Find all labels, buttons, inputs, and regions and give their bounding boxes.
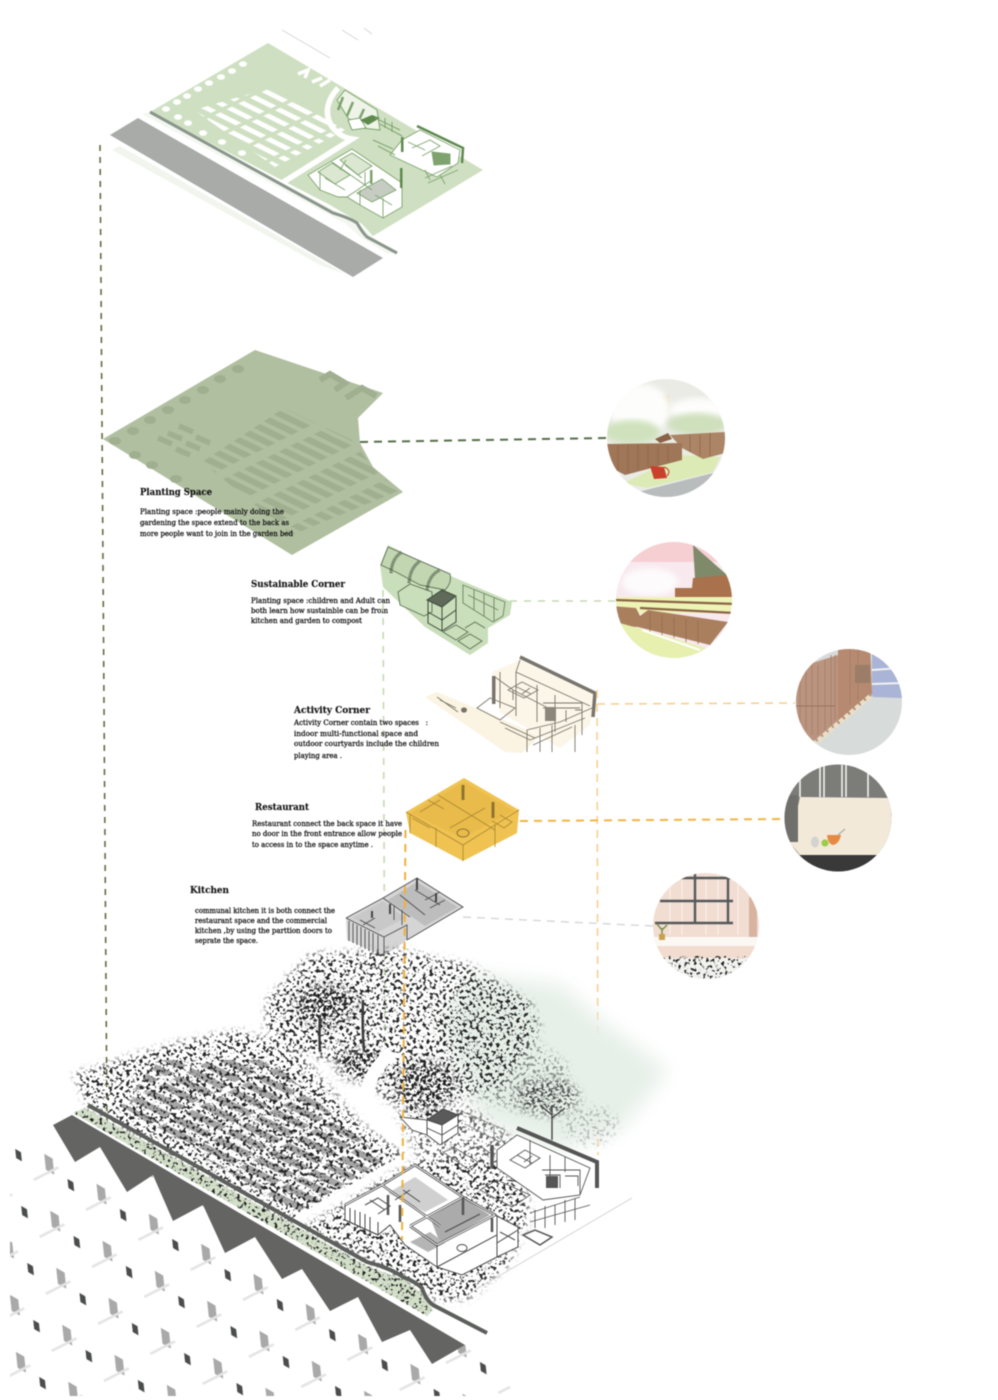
pergola	[427, 590, 456, 631]
base: white garden path	[295, 1052, 425, 1224]
dark kerb line	[150, 112, 397, 253]
walls	[346, 878, 463, 956]
dashed leader: activity to base	[597, 690, 598, 1155]
green base	[380, 545, 512, 655]
base: tree canopy	[266, 950, 618, 1145]
base: activity linework	[470, 1128, 632, 1293]
heading: Sustainable Corner: Sustainable Corner	[251, 580, 345, 590]
feature tree	[515, 1079, 579, 1115]
greenhouse outline	[381, 547, 450, 590]
kitchen and restaurant block	[308, 149, 402, 218]
green site plane	[150, 43, 483, 236]
pale ground strip under road	[112, 146, 345, 274]
cream courtyard	[425, 692, 540, 753]
text: activity corner description: Activity Corner contain two spaces :	[293, 718, 428, 727]
circular planters	[109, 365, 244, 483]
columns	[388, 1195, 492, 1232]
dashed leader: restaurant to circle	[520, 819, 785, 821]
text: kitchen description: seprate the space.	[195, 936, 258, 945]
building floor	[492, 660, 595, 748]
white pavement strip along road	[142, 112, 396, 254]
window block	[545, 707, 556, 721]
base: pergola and planters	[400, 1109, 505, 1169]
right side light canopy	[480, 1040, 570, 1112]
grey road	[110, 118, 383, 277]
heading: Kitchen: Kitchen	[190, 886, 229, 896]
circle: restaurant counter vignette	[784, 764, 892, 872]
text: sustainable corner description: both learn how sustainble can be from	[251, 606, 388, 615]
circle: kitchen window vignette	[652, 872, 760, 980]
columns	[463, 785, 493, 818]
yellow volume	[406, 778, 519, 861]
dashed leader: sustainable to circle	[510, 600, 617, 602]
dark fixtures	[372, 878, 436, 918]
courtyard dot	[461, 707, 467, 713]
text: restaurant description: no door in the front entrance allow people	[252, 829, 402, 838]
shed	[398, 584, 432, 616]
building white footprint	[345, 1165, 518, 1275]
facade	[345, 1190, 518, 1267]
circle: sustainable corner vignette	[615, 542, 733, 658]
greenhouse ribs	[391, 552, 440, 590]
text: sustainable corner description: kitchen and garden to compost	[251, 616, 362, 625]
text: planting space description: Planting space :people mainly doing the	[140, 507, 284, 516]
interior floor	[411, 782, 514, 838]
long garden beds	[202, 408, 398, 535]
activity corner layer	[425, 657, 595, 753]
L-shaped beds	[320, 374, 376, 398]
white paths	[282, 88, 352, 183]
text: kitchen description: communal kitchen it is both connect the	[195, 906, 335, 915]
heading: Restaurant: Restaurant	[255, 803, 310, 813]
text: kitchen description: restaurant space and the commercial	[195, 916, 328, 925]
base: kerb line	[88, 1105, 487, 1333]
dark wall caps	[520, 657, 595, 717]
base: planting field	[74, 1030, 405, 1224]
white circular planters	[162, 61, 247, 156]
text: planting space description: gardening the space extend to the back as	[140, 518, 289, 527]
trunks	[320, 1000, 364, 1052]
sage green plane	[103, 350, 403, 555]
sustainable corner block	[337, 90, 402, 155]
white L-shaped beds	[298, 70, 330, 86]
text: activity corner description: playing area .	[294, 751, 342, 760]
darker floors	[388, 882, 458, 926]
compost boxes	[443, 622, 485, 649]
base: dark sawtooth road	[53, 1115, 465, 1364]
grey beds	[120, 1060, 385, 1212]
dashed leader: sustainable to base	[383, 590, 385, 1070]
text: restaurant description: to access in to the space anytime .	[252, 840, 373, 849]
dense canopy knots	[395, 1061, 455, 1109]
activity block	[390, 126, 463, 184]
double wall tops light	[345, 1165, 495, 1245]
text: restaurant description: Restaurant connect the back space it have	[252, 819, 402, 828]
faint context lines	[282, 28, 372, 58]
circle: planting beds vignette	[606, 379, 726, 498]
planter racks	[463, 585, 505, 622]
kitchen layer	[346, 878, 463, 956]
interior walls	[406, 795, 519, 861]
grey floors	[430, 1198, 490, 1243]
dashed leader: activity to circle	[597, 703, 795, 704]
base: green verge	[73, 1108, 433, 1316]
text: activity corner description: indoor multi-functional space and	[294, 729, 418, 738]
speckle ground	[74, 1030, 405, 1224]
grey volume	[346, 878, 463, 956]
dashed leader: restaurant to base	[402, 830, 406, 1240]
text: kitchen description: kitchen ,by using the parttion doors to	[195, 926, 332, 935]
circle: activity stairs vignette	[795, 648, 902, 756]
text: sustainable corner description: Planting space :children and Adult can	[251, 596, 390, 605]
small beds	[158, 426, 210, 455]
base: door pattern ground	[10, 1125, 520, 1396]
furniture	[457, 1244, 467, 1252]
heading: Activity Corner: Activity Corner	[293, 706, 370, 716]
dashed leader: site plan down to base	[100, 145, 107, 1125]
activity walls	[437, 660, 592, 752]
white bed grid	[194, 88, 345, 167]
text: activity corner description: outdoor courtyards include the children	[294, 739, 439, 748]
heading: Planting Space: Planting Space	[140, 488, 212, 498]
top site plan in green	[110, 28, 483, 277]
sustainable corner layer	[380, 545, 512, 655]
base: kitchen and restaurant linework	[345, 1165, 518, 1275]
double wall tops dark	[345, 1165, 495, 1245]
planting layer	[103, 350, 403, 555]
round table	[457, 829, 469, 837]
base: speckle around buildings	[302, 1105, 530, 1302]
restaurant layer	[406, 778, 519, 861]
text: planting space description: more people want to join in the garden bed	[140, 529, 293, 538]
faint far tree	[562, 1105, 618, 1145]
canopy speckle	[266, 950, 540, 1128]
dashed leader: kitchen to circle	[463, 917, 653, 926]
dashed leader: planting to circle	[360, 438, 607, 442]
base: watercolour wash	[440, 975, 668, 1150]
